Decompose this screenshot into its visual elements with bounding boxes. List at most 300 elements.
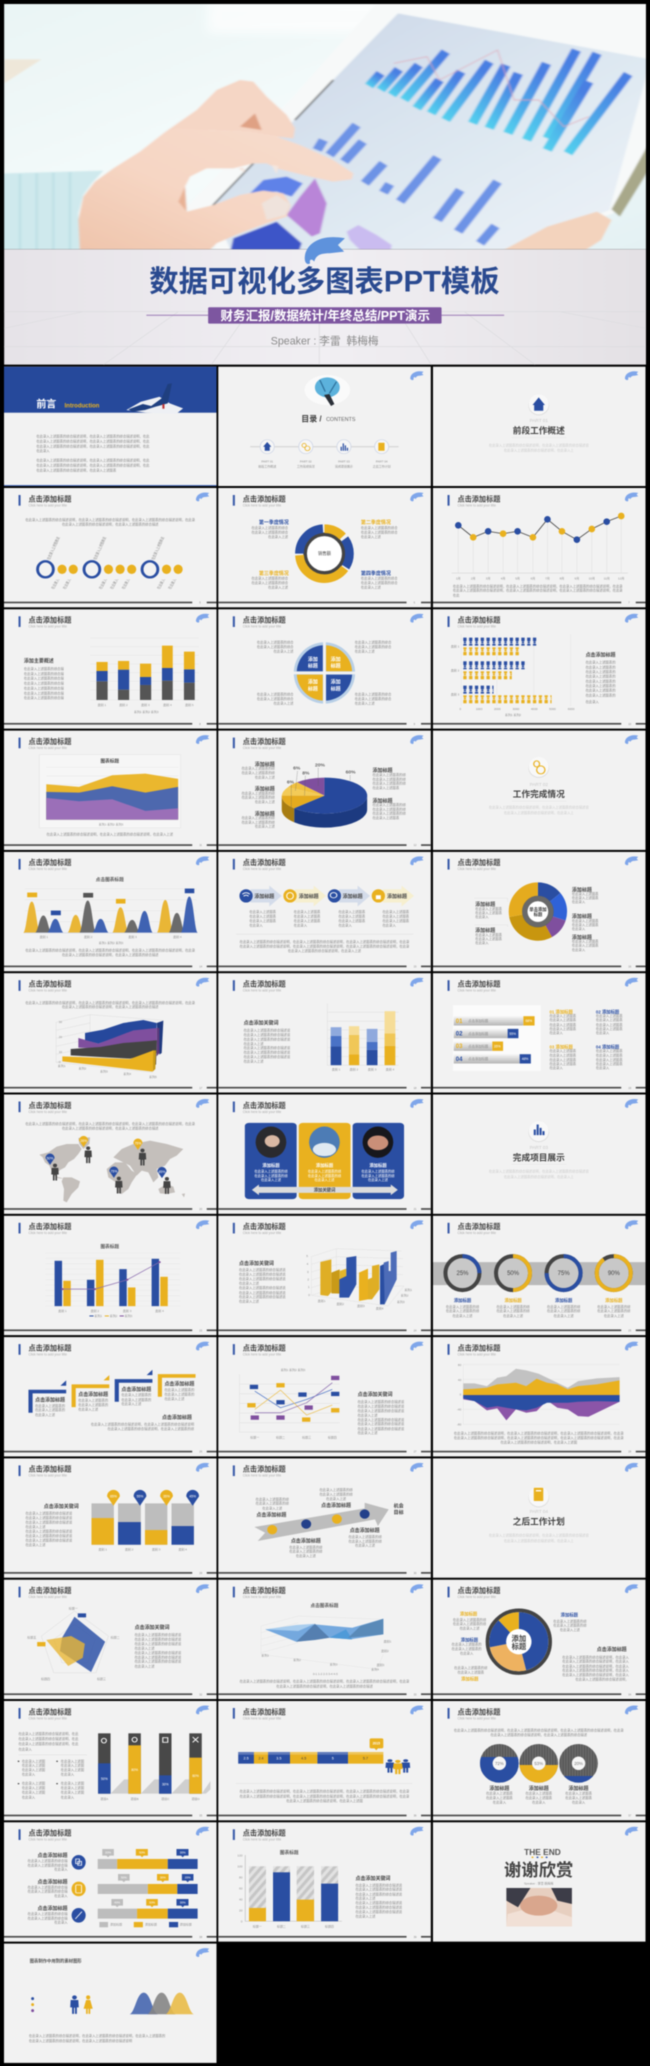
card text: 在此录入上述图表的综 [254, 1168, 288, 1173]
text block: 在此录入上述图表的 [586, 692, 616, 697]
text block: 在此录入上述图表的综合描述说 [26, 1510, 73, 1515]
percent pins: 65% [110, 1495, 117, 1499]
value tags: 20% [105, 1850, 111, 1854]
slide 39: hatched column chart [218, 1822, 431, 1942]
progress card: 48% [522, 1057, 528, 1061]
axis labels: 20 [59, 1035, 62, 1039]
text block: 在此录入上述 [239, 1298, 260, 1303]
text block: 在此录入上述图表的综合描述说明，在此录入上述图表的综合描述说明，在此录入上述图表的综合描述说明，在此录 [453, 583, 623, 588]
slide 6: segmented donut: 6 [414, 601, 416, 605]
card text: 在此录入上述图表的综 [308, 1168, 342, 1173]
percent labels: 6% [293, 766, 301, 772]
donut chart [516, 889, 560, 934]
bullet list: 在此录入上述图 [61, 1763, 85, 1768]
axis labels: 类别1 [318, 1298, 326, 1303]
title [28, 1586, 71, 1599]
text block: 点击添加关键词 [356, 1875, 390, 1882]
main title: 数据可视化多图表PPT模板 [149, 266, 500, 299]
month axis: 2月 [471, 576, 476, 580]
title: Click here to add your title [243, 1838, 281, 1842]
row text: 在此录入 [54, 1893, 68, 1898]
legend: 添加标题 [110, 1922, 122, 1927]
value tags: 30% [149, 1900, 155, 1904]
slide 23: combo chart: 23 [199, 1328, 203, 1332]
slide 15: four arrows [218, 852, 431, 971]
progress card: 55% [509, 1032, 516, 1036]
legend [99, 1922, 192, 1927]
title: Click here to add your title [457, 625, 496, 629]
slide 30: opportunity arrow: 30 [414, 1571, 417, 1575]
slide 23: combo chart: 系列2 [110, 1313, 118, 1318]
text columns: 在此录入上述图表 [249, 909, 277, 914]
pie label text: 在此录入上述图表 [457, 1669, 485, 1674]
text block: 在此录入上述图表的综合描述说 [244, 1032, 291, 1037]
slide 41: material shapes [4, 1944, 216, 2063]
right labels: 在此录入上述图表 [572, 922, 599, 927]
axis labels: 类别 3 [368, 1067, 377, 1072]
title [243, 1343, 286, 1356]
slide 37: three fill donuts [433, 1701, 645, 1820]
bullet list: 在此录入上述图 [61, 1758, 85, 1763]
text block: preface paragraphs [36, 434, 150, 472]
card photos [256, 1126, 393, 1158]
axis labels: 系列1 [404, 1287, 412, 1292]
arrow labels [254, 893, 407, 900]
people and location pins [45, 1136, 171, 1194]
text block: 在此录入上述图表的综合描述说 [239, 1271, 286, 1276]
progress card: 68% [525, 1019, 532, 1023]
donut centre label: 销售额 [318, 550, 332, 557]
right labels: 在此录入上述图表的综 [373, 811, 406, 816]
text block: 在此录入上述图表的综合描述说 [244, 1028, 291, 1033]
axis labels: 80 [239, 1875, 243, 1879]
axis labels [250, 1434, 337, 1439]
left labels: 在此录入上述图表的综 [242, 819, 276, 824]
3D bars [311, 1249, 404, 1306]
part labels: 之后工作计划 [373, 463, 391, 468]
ring text: 在此录入上述 [604, 1313, 625, 1318]
card titles: 添加标题 [262, 1162, 280, 1169]
slide 26: stepped L shapes [4, 1337, 216, 1456]
section heading: 前段工作概述 [513, 425, 565, 436]
slide 22: part 03 section [433, 1094, 645, 1214]
title: Click here to add your title [28, 1352, 67, 1356]
text block [454, 1430, 624, 1444]
right labels: 在此录入上述图表 [572, 943, 599, 948]
text block: 在此录入上述图表的综合描述说 [358, 1399, 405, 1404]
slide 12: 3D pie chart [218, 731, 431, 850]
month axis: 5月 [515, 576, 520, 580]
radar chart [37, 1611, 108, 1673]
text block: 在此录入上述图表的综合描述说 [356, 1900, 403, 1905]
month axis: 11月 [604, 576, 610, 580]
step text: 在此录入上述图表的 [78, 1402, 109, 1407]
value tags: 50% [139, 1850, 145, 1854]
text block: 在此录入上述图表的综合描述说 [358, 1421, 405, 1426]
label: quarter two: 在此录入上述 [361, 534, 382, 539]
hatched columns [245, 1855, 342, 1921]
chart axis labels: 类别 4 [163, 702, 172, 707]
slide 15: four arrows: 15 [414, 965, 417, 969]
text block [24, 658, 65, 700]
right labels: 在此录入 [572, 947, 586, 952]
people and location pins: 50% [47, 1156, 53, 1160]
title: 点击添加标题 [457, 858, 500, 867]
text block: 在此录入上述图表的综合描述说 [358, 1426, 405, 1431]
slide 11: stacked area chart [4, 731, 216, 850]
row titles: 点击添加标题 [38, 1878, 67, 1885]
text block: 在此录入上述图表的综合描 [24, 685, 65, 690]
columns: 30% [162, 1783, 169, 1787]
ring pie chart [487, 1610, 550, 1673]
title: Click here to add your title [28, 625, 67, 629]
bullet list: 在此录入 [61, 1772, 75, 1777]
axis labels: 60 [239, 1886, 243, 1890]
row text: 在此录入 [54, 1920, 68, 1925]
left labels [474, 898, 508, 945]
card titles: 添加标题 [369, 1162, 387, 1169]
row text: 在此录入上述图表的综合描 [28, 1889, 68, 1894]
bullet list: 在此录入上述图 [22, 1758, 46, 1763]
section description [489, 1533, 589, 1543]
step text: 在此录入上述图表的 [164, 1387, 195, 1392]
text columns: 在此录入上述图表 [382, 918, 410, 923]
progress card: 点击添加标题 [468, 1044, 489, 1049]
part labels: 工作完成情况 [297, 463, 315, 468]
title [243, 1222, 286, 1235]
text block: preface paragraphs: 在此录入上述图表的综合描述说明，在此录入上述图表 [36, 467, 117, 472]
axis labels: 4 [307, 1262, 309, 1266]
axis labels: 类别3 [377, 1662, 385, 1667]
ring text: 在此录入上述图表的综 [446, 1308, 480, 1313]
title [243, 616, 286, 629]
title: 点击添加标题 [243, 1343, 286, 1352]
rotated labels: 在此录入上述图表说 [92, 536, 108, 560]
heading: contents [301, 415, 356, 424]
left labels: 添加标题 [255, 786, 275, 793]
text block: 在此录入上述 [358, 1412, 378, 1417]
label: quarter two: 第二季度情况 [361, 519, 391, 526]
part labels [258, 460, 391, 468]
title [28, 858, 71, 871]
axis labels [58, 1020, 157, 1079]
title: Click here to add your title [243, 1352, 281, 1356]
title [457, 494, 500, 507]
pie label text: 在此录入上述图表的综 [553, 1623, 587, 1628]
left labels: 在此录入 [475, 940, 489, 945]
month axis: 7月 [545, 576, 550, 580]
slide 39: hatched column chart: 标题四 [325, 1923, 334, 1928]
slide 28: diverging area chart [433, 1337, 645, 1456]
quadrant labels: 标题 [331, 685, 341, 692]
text columns [249, 909, 410, 928]
title band background [4, 249, 646, 365]
chart axis labels: 类别 5 [185, 702, 194, 707]
icon: house [528, 394, 549, 415]
L shaped steps [28, 1370, 196, 1413]
text block: 点击添加标题 [597, 1646, 627, 1653]
ring titles: 添加标题 [454, 1297, 472, 1304]
progress card: 02 [456, 1032, 463, 1038]
pie label text: 在此录入 [460, 1650, 474, 1655]
axis labels: 0 [460, 1392, 462, 1396]
arrow labels: 添加标题 [387, 893, 407, 900]
value tags: 30% [180, 1900, 186, 1904]
value tags: 20% [185, 1875, 191, 1879]
icon: bar chart [528, 1121, 549, 1142]
slide 36: segmented timeline bar [218, 1701, 431, 1820]
title [243, 1101, 286, 1114]
text block: 在此录入上述图表的综合描述说明，在此录入上述图 [286, 1798, 363, 1803]
step labels [35, 1380, 194, 1403]
cover hero panel [0, 0, 650, 365]
title [243, 980, 286, 993]
text block: 在此录入上述图表的综合描述说明，在此录入上述图表的综合描述 [276, 1683, 373, 1688]
axis labels and legend: 类别 1 [40, 934, 48, 939]
value tags: 30% [160, 1875, 166, 1879]
section description: 在此录入上述图表的综合描述说明，在此录入上述图表的综合描述说 [489, 804, 589, 809]
bullet list: 在此录入上述图 [22, 1767, 46, 1772]
milestone text: 在此录入上述图表的综 [256, 1501, 290, 1506]
title: 点击添加标题 [243, 858, 286, 867]
overlapping bell shapes [130, 1993, 194, 2014]
donut chart [299, 529, 349, 579]
column shadows [111, 1779, 210, 1794]
title [28, 1707, 71, 1720]
rotated labels: 在此录入上述图表说 [45, 536, 61, 560]
axis labels: 5 [306, 1254, 308, 1258]
title: 点击添加标题 [28, 1586, 71, 1595]
text blocks [257, 640, 392, 706]
text block: 在此录入上述图表的综合描述说 [26, 1528, 73, 1533]
label: quarter three: 在此录入上述图表的综合 [252, 580, 289, 585]
axis labels and legend: 类别 1 [58, 1308, 67, 1313]
rotated labels [45, 536, 178, 590]
value tags [102, 1849, 193, 1907]
milestone text: 在此录入上述图表的综 [349, 1534, 382, 1539]
title: Click here to add your title [28, 1231, 67, 1235]
slide 9: four quadrant circle: 9 [414, 722, 416, 726]
right labels: 添加标题 [373, 797, 392, 804]
arrow labels: 添加标题 [343, 893, 363, 900]
label columns: 在此录入上述图表 [550, 1053, 577, 1058]
columns: 50% [101, 1777, 108, 1781]
month axis: 12月 [618, 576, 624, 580]
title [243, 1707, 286, 1720]
text block: preface paragraphs: 在此录入 [36, 448, 50, 453]
label columns: 在此录入上述图表 [550, 1026, 577, 1031]
speaker line: Speaker : 李雷 韩梅梅 [271, 334, 379, 347]
text block: 在此录入上述 [135, 1645, 155, 1650]
ring and dot timeline [38, 561, 183, 577]
text block: 在此录入上述图表的综合描述说明，在此录入上述 [288, 948, 362, 953]
right labels: 在此录入上述图表的综 [373, 772, 406, 777]
percent labels [287, 763, 356, 786]
rotated labels: 在此录入 [120, 578, 131, 590]
gauge text: 在此录入上述图表 [565, 1791, 593, 1796]
axis labels: 系列1 [261, 1653, 269, 1658]
section heading [513, 1509, 565, 1527]
axis labels: 系列5 [149, 1074, 157, 1079]
text block [240, 939, 410, 953]
text block: 点击添加标题 [586, 652, 615, 659]
step text: 在此录入上述 [78, 1406, 99, 1411]
text block: 在此录入上述 [358, 1430, 378, 1435]
text block [240, 1789, 410, 1803]
text block: 在此录入上述图表的 [586, 674, 616, 679]
arrow labels: 添加标题 [299, 893, 319, 900]
axis labels: 2 [307, 1277, 309, 1281]
slide 16: multi-level donut [433, 852, 645, 971]
rising arrow [254, 1503, 389, 1541]
milestone titles [256, 1502, 380, 1544]
axis labels and legend: 类别 3 [123, 1308, 132, 1313]
label: quarter two: 在此录入上述图表的综合 [361, 525, 398, 530]
text columns: 在此录入上述图表 [339, 914, 366, 919]
month axis: 8月 [560, 576, 564, 580]
label: quarter two: 在此录入上述图表的综合 [361, 530, 398, 535]
year tag [370, 1738, 383, 1750]
step text: 在此录入上述图表的 [121, 1397, 152, 1402]
axis labels: 系列4 [371, 1667, 379, 1672]
part labels: 前段工作概述 [258, 463, 276, 468]
axis labels [332, 1067, 395, 1072]
slide 14: bell mountain chart: 14 [199, 965, 203, 969]
text block: 在此录入上述图表的综合描 [24, 690, 65, 695]
text block: 在此录入上述图表的综合描述说明，在此录入上述图表的综合描述说明，在此录入上述图表的综合描述说明，在此录 [25, 1000, 196, 1005]
right labels: 在此录入上述图表 [572, 895, 599, 900]
text block [244, 1020, 291, 1064]
text block: 在此录入上述图表的综合描述说明，在此录入上述图 [501, 1439, 578, 1444]
donut centre label: 单击添加 [529, 906, 547, 913]
part labels: PART 01 [261, 460, 273, 464]
text blocks: 在此录入上述 [274, 701, 294, 706]
text block: preface paragraphs: 在此录入上述图表的综合描述说明，在此录入上述图表的综合描述说明，在此 [36, 462, 150, 467]
radar labels: 标题二 [111, 1635, 120, 1640]
slide 17: 3D area chart: 17 [199, 1086, 203, 1090]
card text: 在此录入上述 [261, 1177, 282, 1182]
percent labels: 8% [302, 771, 310, 777]
slide 8: stacked column chart: 8 [199, 722, 201, 726]
step text: 在此录入上述 [121, 1401, 142, 1406]
arrow labels: 添加标题 [254, 893, 274, 900]
rotated labels: 在此录入 [166, 578, 178, 590]
slide 31: part 04 section [433, 1458, 645, 1578]
text block: 在此录入上述图表的综合描述说明，在此录入上述图表的综合描述说明，在此录入上述图表的综合描述说明，在此录 [454, 1435, 624, 1440]
step text: 在此录入上述 [35, 1412, 56, 1417]
right labels: 在此录入 [572, 926, 586, 931]
milestone balls [267, 1509, 370, 1534]
bar values: 5 [332, 1757, 334, 1761]
radar labels: 标题五 [27, 1635, 36, 1640]
step text: 在此录入上述 [164, 1396, 185, 1401]
progress card: 04 [456, 1057, 463, 1063]
text block: preface paragraphs: 在此录入上述图表的综合描述说明，在此录入上述图表的综合描述说明，在此 [36, 434, 150, 439]
gauge titles: 添加标题 [529, 1785, 549, 1792]
slide 10: pictogram bars: 10 [628, 722, 632, 726]
slide 13: part 02 section [433, 731, 645, 850]
progress card: 35% [494, 1045, 501, 1049]
title [243, 494, 286, 507]
text block: 在此录入上述图表的综合描述说 [135, 1654, 182, 1659]
left labels: 在此录入 [475, 914, 489, 919]
title: Click here to add your title [457, 503, 496, 507]
month axis: 9月 [575, 576, 579, 580]
left labels: 在此录入上述图表 [475, 936, 503, 941]
slide 35: tall icon columns: 35 [199, 1814, 203, 1818]
slide 14: bell mountain chart [4, 852, 216, 971]
illustration: blue magnifier object [305, 375, 350, 406]
pie label text: 在此录入上述图表的综 [453, 1617, 487, 1622]
slide 24: 3D column chart: 24 [414, 1328, 417, 1332]
title [28, 1829, 71, 1842]
slide 5: ring timeline: 5 [199, 601, 201, 605]
label columns: 02 添加标题 [596, 1009, 620, 1016]
left labels [242, 761, 276, 829]
text block: 在此录入上述图表的综合描述说明，在此 [19, 1736, 79, 1741]
icon: notebook [528, 1486, 549, 1507]
label columns: 04 添加标题 [596, 1044, 620, 1051]
text block [25, 1121, 196, 1130]
pie labels: 添加标题 [561, 1612, 579, 1619]
percent pins: 55% [137, 1495, 143, 1499]
slide 39: hatched column chart: 标题一 [253, 1923, 262, 1928]
milestone titles: 点击添加标题 [321, 1502, 351, 1509]
milestone text: 在此录入上述图表的综 [349, 1538, 382, 1543]
value tags: 30% [180, 1850, 186, 1854]
left labels: 在此录入上述 [255, 824, 276, 829]
label columns: 在此录入 [550, 1030, 563, 1035]
text block: 在此录入上述图表的综合描述说明，在此录入 [562, 1659, 630, 1664]
title: 点击添加标题 [28, 1465, 71, 1474]
ring percentages: 75% [558, 1271, 570, 1277]
title: 点击添加标题 [28, 1222, 71, 1231]
card text: 在此录入上述图表的综 [361, 1168, 395, 1173]
icon: man and woman [70, 1995, 93, 2014]
label columns: 01 添加标题 [550, 1009, 574, 1016]
title: 点击添加标题 [28, 494, 71, 503]
label: quarter two [361, 519, 398, 539]
step text: 在此录入上述图表的 [35, 1403, 66, 1408]
step labels: 点击添加标题 [164, 1380, 194, 1387]
colour dots [31, 1997, 34, 2012]
text block: 在此录入上述图表的综合描述说 [244, 1045, 291, 1050]
slide 20: world map: 20 [199, 1207, 203, 1211]
label columns: 在此录入上述图表 [550, 1057, 577, 1062]
title: 点击添加标题 [28, 616, 71, 625]
section description: 在此录入上述图表的综合描述说明，在此录入上 [504, 447, 574, 452]
axis labels: 系列2 [293, 1657, 301, 1662]
text blocks: 在此录入上述 [355, 649, 375, 654]
gauge text: 在此录入上述图表 [486, 1795, 513, 1800]
card text: 在此录入上述 [315, 1177, 335, 1182]
text block: 在此录入上述图表的综合描述说 [356, 1909, 403, 1914]
title: 点击添加标题 [457, 494, 500, 503]
text block: 在此录入上述 [244, 1059, 264, 1064]
slide 33: 3D surface chart: 33 [414, 1692, 417, 1696]
text block [239, 1260, 286, 1303]
text block [25, 948, 196, 957]
text block: 在此录入上述图表的综合描述说 [26, 1537, 73, 1542]
people and location pins: 75% [135, 1141, 141, 1145]
title: 点击添加标题 [28, 737, 71, 746]
section heading: PART 01 [530, 418, 548, 423]
axis labels and legend: 类别 2 [84, 934, 93, 939]
text blocks: 在此录入上述图表的综合 [355, 644, 392, 649]
text block: 在此录入上述图表的综合描述说 [356, 1882, 403, 1887]
ring percentages: 25% [457, 1271, 469, 1277]
milestone text: 在此录入上述图表的综 [319, 1487, 353, 1492]
